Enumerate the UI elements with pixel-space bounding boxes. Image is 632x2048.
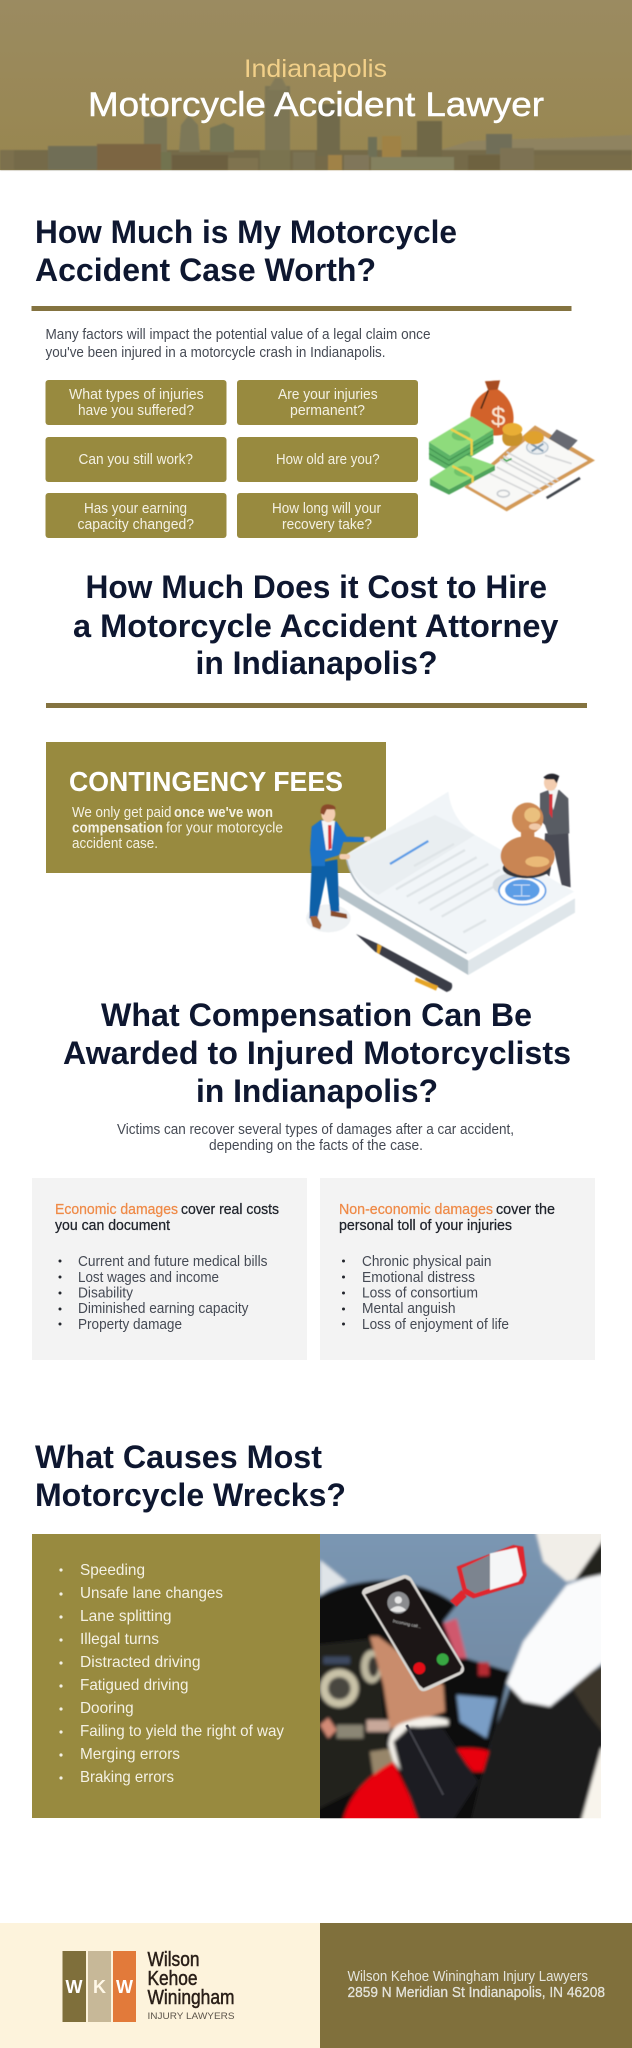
non-economic heading bbox=[339, 1202, 555, 1234]
economic heading: you can document bbox=[55, 1218, 170, 1234]
illustration: money and clipboard bbox=[429, 380, 595, 511]
button: permanent: permanent? bbox=[290, 403, 365, 419]
panel: contingency fees bbox=[46, 742, 386, 873]
contingency text: We only get paid bbox=[72, 805, 171, 821]
logo mark bbox=[62, 1951, 136, 2022]
logo wordmark: INJURY LAWYERS bbox=[148, 2011, 234, 2021]
intro text: Many factors will impact the potential value of a legal claim once bbox=[46, 327, 430, 343]
heading: compensation: What Compensation Can Be bbox=[101, 997, 532, 1033]
contingency text: for your motorcycle bbox=[166, 820, 283, 836]
button: earning capacity: Has your earning bbox=[84, 501, 187, 517]
button: earning capacity bbox=[46, 493, 226, 538]
compensation intro text bbox=[117, 1122, 514, 1154]
non-economic list: Emotional distress bbox=[362, 1270, 475, 1286]
heading: compensation bbox=[63, 997, 571, 1109]
contingency text: once we've won bbox=[174, 805, 273, 821]
contingency text: compensation bbox=[72, 820, 163, 836]
panel: causes list bbox=[32, 1534, 320, 1818]
footer: logo panel bbox=[0, 1923, 320, 2048]
button: recovery: recovery take? bbox=[282, 517, 372, 533]
heading: case worth: Accident Case Worth? bbox=[35, 252, 376, 288]
panel: causes list: Illegal turns bbox=[80, 1631, 159, 1648]
photo: rider with phone on motorcycle bbox=[313, 1528, 608, 1825]
economic list: Lost wages and income bbox=[78, 1270, 219, 1286]
button: types of injuries: What types of injuries bbox=[69, 387, 204, 403]
button: types of injuries bbox=[46, 380, 226, 425]
compensation intro text: Victims can recover several types of damages after a car accident, bbox=[117, 1122, 514, 1138]
economic list bbox=[58, 1254, 268, 1333]
panel: causes list: Failing to yield the right of way bbox=[80, 1723, 284, 1740]
economic list: Property damage bbox=[78, 1317, 182, 1333]
photo: rider with phone on motorcycle: Incoming call... bbox=[392, 1618, 422, 1629]
non-economic heading: personal toll of your injuries bbox=[339, 1218, 512, 1234]
footer: address panel bbox=[320, 1923, 632, 2048]
button: how old: How old are you? bbox=[276, 452, 380, 468]
panel: causes list: Braking errors bbox=[80, 1769, 174, 1786]
logo wordmark: Wilson bbox=[148, 1949, 200, 1971]
heading: causes: Motorcycle Wrecks? bbox=[35, 1477, 346, 1513]
non-economic list bbox=[342, 1254, 509, 1333]
contingency heading: CONTINGENCY FEES bbox=[69, 766, 343, 797]
heading: attorney cost: in Indianapolis? bbox=[196, 645, 438, 681]
compensation intro text: depending on the facts of the case. bbox=[209, 1138, 423, 1154]
heading: compensation: Awarded to Injured Motorcyclists bbox=[63, 1035, 571, 1071]
logo mark: K bbox=[93, 1977, 106, 1997]
economic heading bbox=[55, 1202, 279, 1234]
button: earning capacity: capacity changed? bbox=[78, 517, 194, 533]
panel: causes list: Unsafe lane changes bbox=[80, 1585, 223, 1602]
button: permanent: Are your injuries bbox=[278, 387, 378, 403]
question buttons bbox=[46, 380, 418, 538]
footer bbox=[0, 1923, 632, 2048]
panel: causes list: Distracted driving bbox=[80, 1654, 200, 1671]
illustration: money and clipboard: $ bbox=[491, 401, 506, 431]
logo mark: W bbox=[66, 1977, 82, 1997]
contingency text bbox=[72, 805, 283, 852]
non-economic list: Chronic physical pain bbox=[362, 1254, 491, 1270]
non-economic heading: Non-economic damages bbox=[339, 1202, 493, 1218]
heading: causes bbox=[35, 1439, 346, 1513]
button: types of injuries: have you suffered? bbox=[78, 403, 194, 419]
footer: address panel: 2859 N Meridian St Indianapolis, IN 46208 bbox=[348, 1985, 605, 2001]
logo mark: W bbox=[116, 1977, 133, 1997]
panel: causes list: Speeding bbox=[80, 1562, 145, 1579]
logo wordmark bbox=[148, 1949, 234, 2021]
panel: causes list: Merging errors bbox=[80, 1746, 180, 1763]
heading: compensation: in Indianapolis? bbox=[196, 1073, 438, 1109]
non-economic list: Loss of enjoyment of life bbox=[362, 1317, 509, 1333]
banner title: Motorcycle Accident Lawyer bbox=[88, 86, 544, 124]
non-economic heading: cover the bbox=[496, 1202, 555, 1218]
economic list: Current and future medical bills bbox=[78, 1254, 268, 1270]
heading: attorney cost: How Much Does it Cost to Hire bbox=[86, 569, 547, 605]
economic heading: Economic damages bbox=[55, 1202, 178, 1218]
logo wordmark: Kehoe bbox=[148, 1968, 198, 1990]
panel: causes list: Lane splitting bbox=[80, 1608, 172, 1625]
location label: Indianapolis bbox=[244, 55, 387, 83]
intro text: you've been injured in a motorcycle crash in Indianapolis. bbox=[46, 345, 386, 361]
logo wordmark: Winingham bbox=[148, 1987, 234, 2009]
button: still work bbox=[46, 437, 226, 482]
heading: case worth: How Much is My Motorcycle bbox=[35, 214, 457, 250]
illustration: lawyers stamping document bbox=[306, 774, 575, 992]
non-economic list: Loss of consortium bbox=[362, 1286, 478, 1302]
panel: economic damages bbox=[32, 1178, 307, 1360]
button: recovery bbox=[237, 493, 418, 538]
economic list: Disability bbox=[78, 1286, 134, 1302]
heading: attorney cost: a Motorcycle Accident Attorney bbox=[73, 608, 559, 644]
economic list: Diminished earning capacity bbox=[78, 1301, 249, 1317]
panel: causes list: Fatigued driving bbox=[80, 1677, 188, 1694]
button: how old bbox=[237, 437, 418, 482]
heading: causes: What Causes Most bbox=[35, 1439, 322, 1475]
contingency text: accident case. bbox=[72, 836, 158, 852]
button: permanent bbox=[237, 380, 418, 425]
skyline bbox=[0, 78, 632, 170]
panel: non-economic damages bbox=[320, 1178, 595, 1360]
heading: case worth bbox=[35, 214, 457, 288]
economic heading: cover real costs bbox=[181, 1202, 279, 1218]
heading: attorney cost bbox=[73, 569, 559, 681]
intro text bbox=[46, 327, 430, 361]
header banner bbox=[0, 0, 632, 170]
footer: address panel: Wilson Kehoe Winingham Injury Lawyers bbox=[348, 1969, 588, 1985]
button: still work: Can you still work? bbox=[78, 452, 193, 468]
non-economic list: Mental anguish bbox=[362, 1301, 456, 1317]
button: recovery: How long will your bbox=[272, 501, 381, 517]
panel: causes list: Dooring bbox=[80, 1700, 134, 1717]
